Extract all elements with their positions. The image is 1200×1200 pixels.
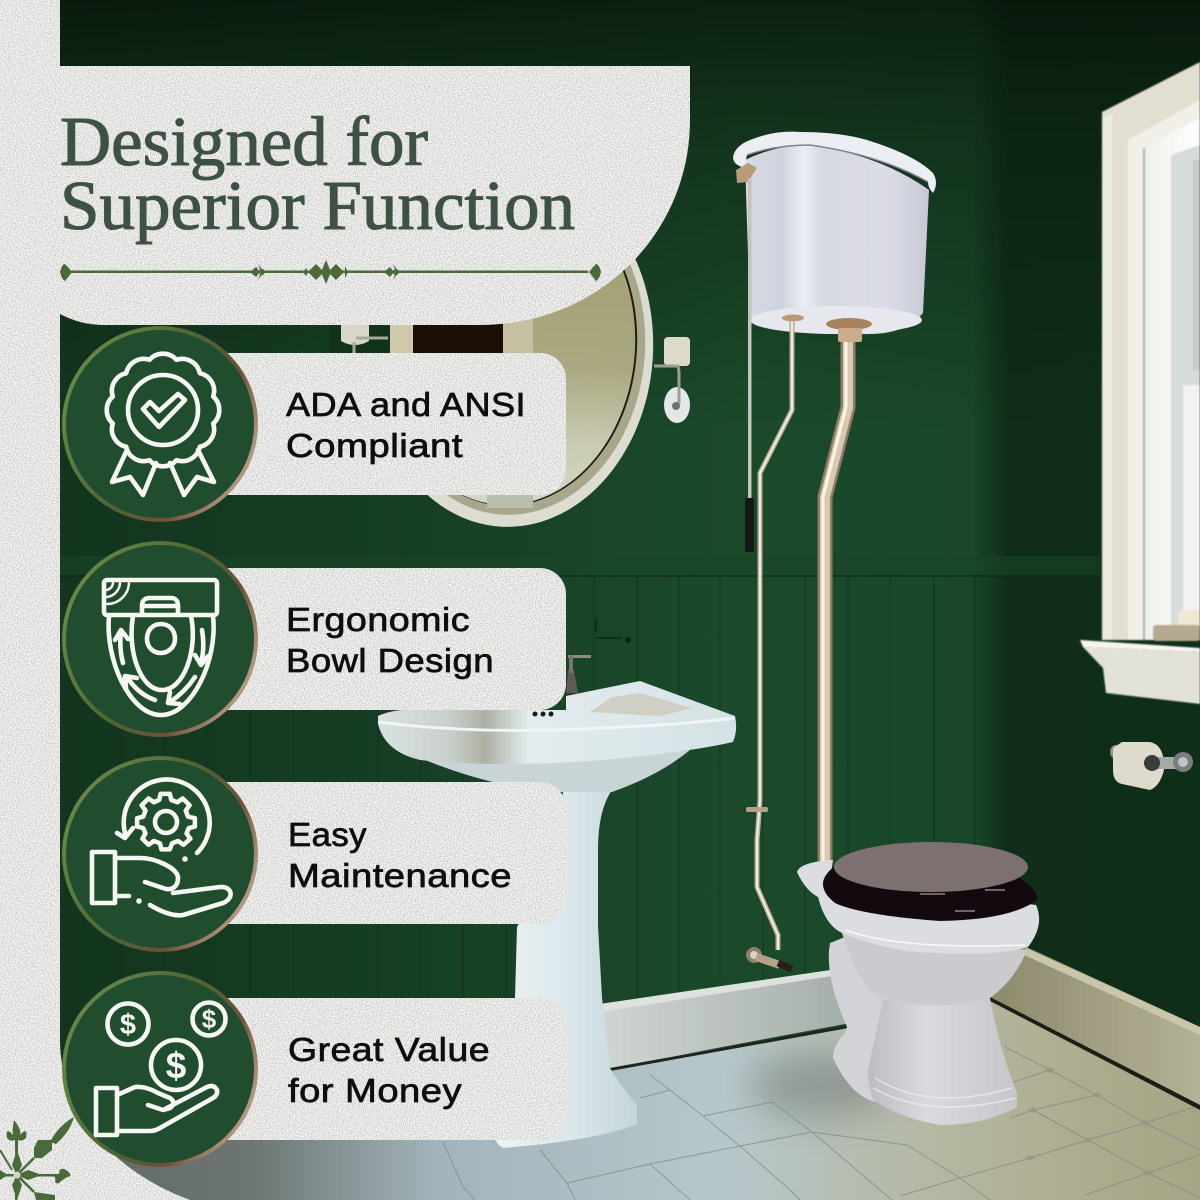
title: Superior Function bbox=[60, 168, 575, 245]
title bbox=[60, 104, 575, 245]
mirror bbox=[330, 164, 665, 536]
row 3 label: Easy bbox=[288, 816, 367, 853]
icon dots bbox=[136, 856, 188, 904]
row 1 label: ADA and ANSI bbox=[286, 386, 526, 423]
row 4 label bbox=[288, 1031, 490, 1109]
row 2 label: Ergonomic bbox=[286, 601, 470, 638]
row 2: pill bbox=[200, 568, 566, 710]
pull chain and handle bbox=[745, 178, 754, 552]
row 1: pill bbox=[200, 353, 566, 495]
icon: toilet bowl with flow arrows bbox=[104, 580, 217, 715]
row 1: icon circle bbox=[64, 328, 256, 520]
floor bbox=[60, 997, 1200, 1200]
header panel bbox=[60, 66, 690, 325]
row 4 label: Great Value bbox=[288, 1031, 490, 1068]
icon: hand with coins: $ bbox=[202, 1004, 217, 1034]
row 1 label: Compliant bbox=[286, 427, 463, 464]
row 2: icon circle bbox=[64, 543, 256, 735]
toilet bowl bbox=[797, 860, 1039, 1125]
icon: certified badge bbox=[107, 354, 219, 495]
wall sconces bbox=[341, 325, 690, 423]
row 3 label bbox=[288, 816, 512, 894]
row 2 label bbox=[286, 601, 494, 679]
icon: hand with gear bbox=[92, 779, 231, 915]
row 3: icon circle bbox=[64, 758, 256, 950]
pedestal sink bbox=[378, 681, 736, 1148]
icon: hand with coins: $ bbox=[166, 1045, 187, 1086]
high tank cistern bbox=[733, 132, 936, 334]
bottom-left ornament: fleur snowflake bbox=[0, 1117, 74, 1200]
row 2 label: Bowl Design bbox=[286, 642, 494, 679]
row 3 label: Maintenance bbox=[288, 857, 512, 894]
faucet bbox=[566, 618, 631, 693]
toilet paper holder bbox=[1110, 742, 1193, 790]
row 3: pill bbox=[200, 782, 566, 924]
row 4 label: for Money bbox=[288, 1072, 462, 1109]
ornamental divider bbox=[60, 260, 601, 284]
window bbox=[1080, 62, 1200, 704]
supply and flush pipes bbox=[746, 314, 872, 969]
left cream strip and bottom corner bbox=[0, 0, 190, 1200]
toilet seat and lid bbox=[823, 842, 1037, 921]
baseboards bbox=[600, 935, 1200, 1110]
row 1 label bbox=[286, 386, 526, 464]
row 4: icon circle bbox=[64, 973, 256, 1165]
title: Designed for bbox=[60, 104, 428, 181]
row 4: pill bbox=[200, 998, 566, 1140]
icon: hand with coins bbox=[96, 1002, 226, 1135]
icon: hand with coins: $ bbox=[120, 1009, 136, 1041]
